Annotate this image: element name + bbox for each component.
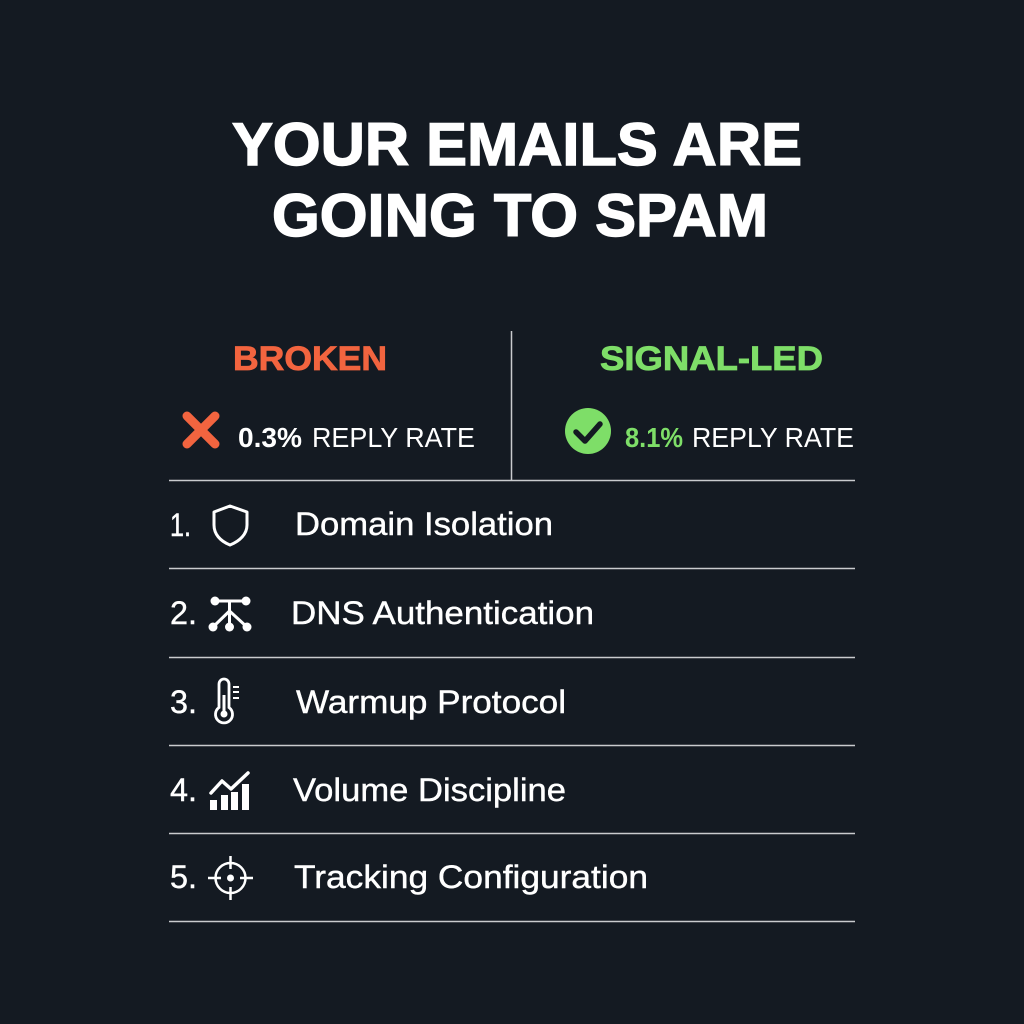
- row 3: warmup protocol: Warmup Protocol: [296, 684, 566, 720]
- row 4: volume discipline: [170, 772, 566, 810]
- icon: target crosshair: [208, 856, 253, 900]
- row 2: dns authentication: [170, 595, 594, 632]
- row 5: tracking configuration: [170, 856, 648, 900]
- stat: broken reply rate: 0.3%: [238, 422, 302, 453]
- row 2: dns authentication: 2.: [170, 595, 197, 631]
- row 2: dns authentication: DNS Authentication: [291, 595, 594, 631]
- heading: signal-led: SIGNAL-LED: [600, 340, 823, 378]
- icon: thermometer: [216, 679, 239, 723]
- row 1: domain isolation: [170, 506, 553, 545]
- icon: dns tree: [208, 596, 252, 632]
- title: GOING TO SPAM: [272, 182, 768, 249]
- icon: rising bar chart: [210, 773, 249, 810]
- row 1: domain isolation: 1.: [170, 507, 191, 543]
- row 3: warmup protocol: 3.: [170, 684, 197, 720]
- panel: signal-led: [565, 340, 854, 454]
- stat: signal-led reply rate: 8.1%: [625, 422, 683, 453]
- row 1: domain isolation: Domain Isolation: [295, 506, 553, 542]
- icon: green check: [565, 408, 611, 454]
- icon: red cross: [187, 416, 215, 444]
- row 4: volume discipline: 4.: [170, 772, 197, 808]
- stat: signal-led reply rate: [625, 422, 854, 453]
- row 5: tracking configuration: Tracking Configuration: [294, 859, 648, 895]
- row 5: tracking configuration: 5.: [170, 859, 197, 895]
- title: YOUR EMAILS ARE: [232, 111, 802, 178]
- stat: broken reply rate: REPLY RATE: [312, 422, 475, 453]
- row 3: warmup protocol: [170, 679, 566, 723]
- heading: broken: BROKEN: [233, 340, 387, 378]
- row 4: volume discipline: Volume Discipline: [293, 772, 566, 808]
- panel: broken: [187, 340, 475, 453]
- stat: signal-led reply rate: REPLY RATE: [692, 422, 854, 453]
- title: [232, 111, 802, 249]
- stat: broken reply rate: [238, 422, 475, 453]
- icon: shield: [214, 506, 247, 545]
